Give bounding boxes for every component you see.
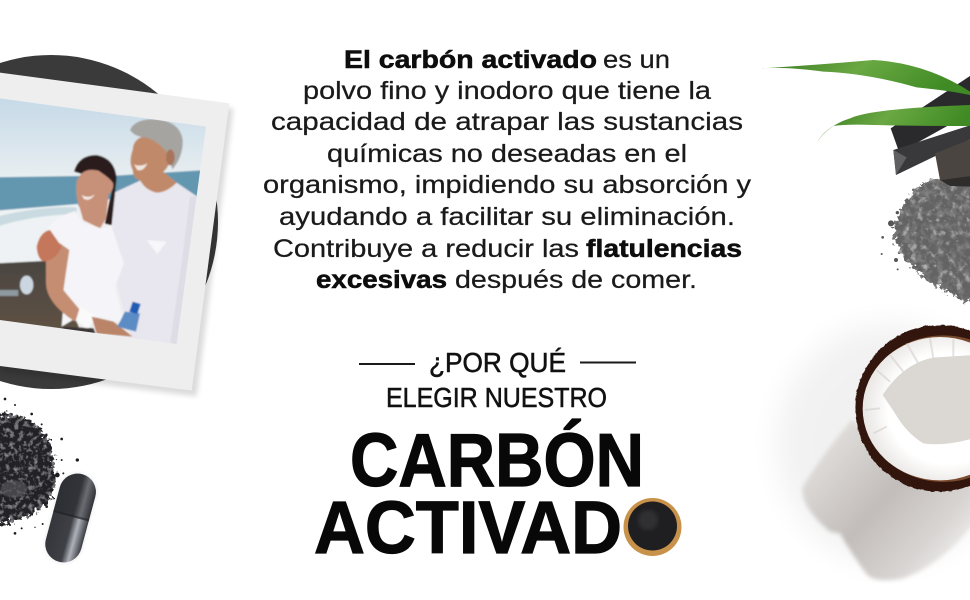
intro paragraph: Contribuye a reducir las (273, 235, 579, 263)
heading: por qué elegir nuestro: ELEGIR NUESTRO (386, 382, 607, 413)
heading: por qué elegir nuestro (359, 347, 636, 413)
man (113, 181, 197, 347)
charcoal sticks, leaves and grey powder (762, 60, 970, 307)
intro paragraph: organismo, impidiendo su absorción y (263, 171, 752, 199)
photo frame (0, 73, 233, 397)
heading: carbón activado: CARBÓN (350, 418, 644, 502)
background circle (0, 55, 218, 389)
intro paragraph: capacidad de atrapar las sustancias (271, 108, 743, 136)
intro paragraph: excesivas (316, 266, 447, 294)
charcoal sticks (891, 76, 970, 187)
intro paragraph: El carbón activado (344, 46, 597, 74)
intro paragraph: después de comer. (455, 266, 697, 294)
charcoal powder pile and capsule (0, 398, 100, 567)
coconut cavity (883, 355, 970, 444)
intro paragraph: es un (603, 46, 670, 74)
heading: carbón activado: ACTIVAD (314, 486, 622, 569)
powder pile (0, 414, 55, 527)
intro paragraph (263, 46, 752, 294)
woman (74, 155, 117, 225)
intro paragraph: químicas no deseadas en el (327, 140, 687, 168)
icon: wooden bowl of charcoal (624, 498, 682, 556)
capsule (41, 469, 100, 567)
coconut shadow (802, 420, 970, 580)
coconut shell (855, 325, 970, 492)
photo: couple at the beach (0, 93, 210, 347)
intro paragraph: polvo fino y inodoro que tiene la (303, 77, 711, 105)
grey powder (893, 174, 970, 307)
intro paragraph: ayudando a facilitar su eliminación. (279, 203, 735, 231)
coconut half and shadow (777, 323, 970, 580)
heading: por qué elegir nuestro: ¿POR QUÉ (429, 347, 566, 378)
green leaves (762, 60, 970, 143)
coconut flesh (863, 337, 970, 480)
intro paragraph: flatulencias (586, 235, 742, 263)
heading: carbón activado (314, 418, 644, 569)
water bottle (117, 312, 140, 332)
